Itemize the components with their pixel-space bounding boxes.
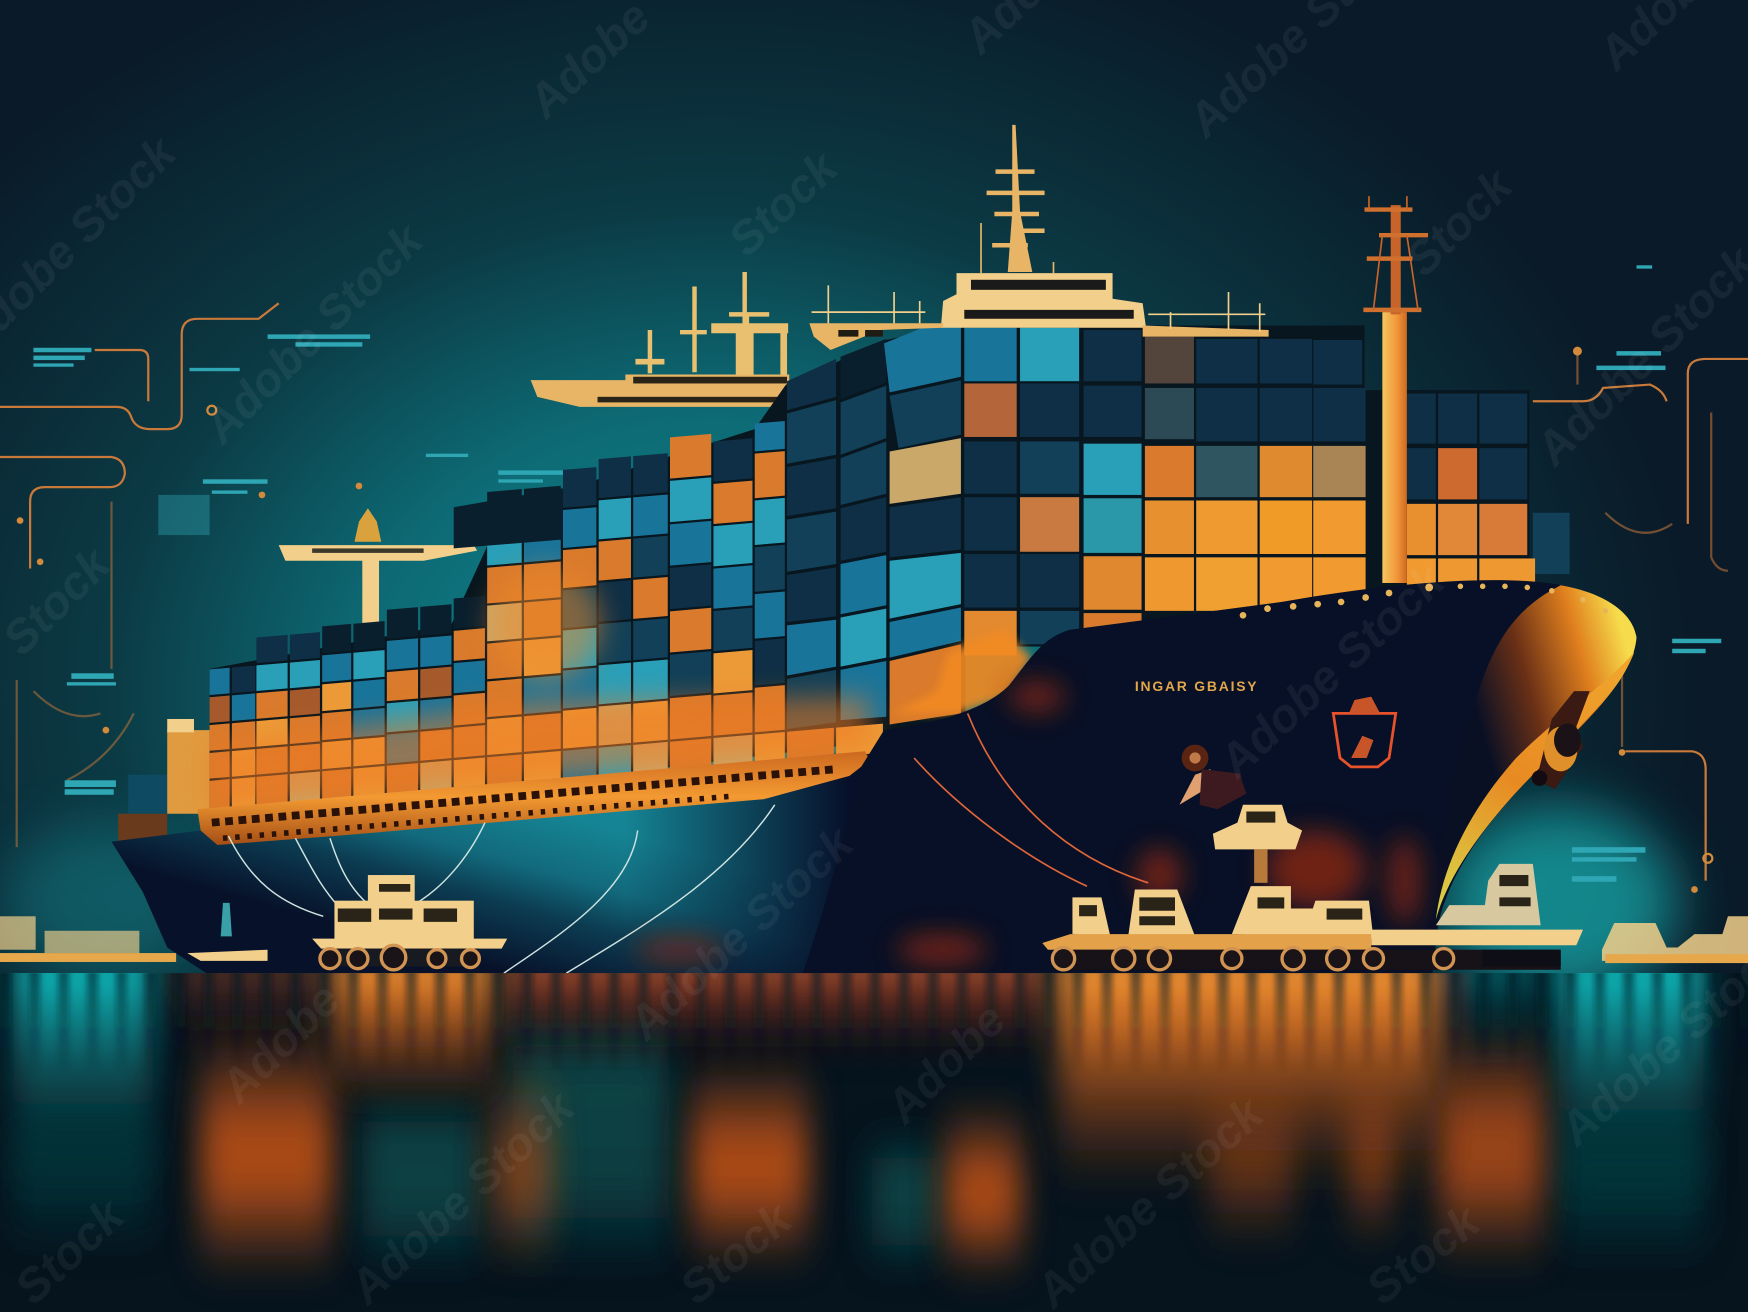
mast yards: [987, 172, 1045, 245]
orange blaze at stack base: [892, 630, 1031, 713]
railing port: [812, 285, 925, 323]
watermark: Adobe Stock: Stock: [718, 140, 848, 266]
tug: crane on hull: [1213, 805, 1302, 883]
row 5: [964, 554, 1535, 611]
forward superstructure: [809, 125, 1269, 350]
background ship: cream vessel: [531, 272, 789, 407]
reflections: bright top band and streaks: [162, 973, 1550, 1184]
starboard wing: [1143, 325, 1269, 337]
watermark: Adobe Stock: Adobe: [875, 993, 1015, 1134]
emblem on hull: [1333, 697, 1396, 767]
foremast: [1363, 196, 1428, 583]
tall column C: [884, 327, 961, 725]
red glow on hull: [635, 681, 1420, 965]
radar mast: [1008, 125, 1032, 272]
stern superstructure: [118, 719, 212, 845]
tall column B: [841, 339, 886, 720]
tug: far right small: [1602, 916, 1748, 963]
tug: far left small: [0, 903, 268, 962]
watermark: Adobe Stock: Adobe Stock: [193, 213, 434, 454]
hull: [531, 375, 789, 407]
reflections: teal light columns: [0, 973, 1726, 1166]
upper bridge block: [941, 273, 1146, 328]
propeller emblem: [1179, 745, 1246, 809]
watermark: Adobe Stock: Adobe Stock: [339, 1079, 585, 1312]
HUD: right circuit lines and data bars: [1533, 265, 1748, 893]
rear container stack: [210, 323, 965, 825]
lower bridge windows: [964, 310, 1134, 319]
tug: left main: [312, 875, 507, 970]
reflections: dark teal columns: [8, 1018, 1711, 1266]
bow flare: bright edge: [1436, 652, 1634, 920]
row 3: [964, 441, 1527, 499]
row 1: [964, 328, 1362, 385]
main mast with platform: [711, 272, 788, 375]
watermark: Adobe Stock: Stock: [1395, 157, 1523, 286]
watermark: Adobe Stock: Stock: [1356, 1194, 1490, 1312]
tall column A: [787, 359, 836, 729]
row 4: [964, 497, 1527, 555]
reflections: orange columns: [201, 1020, 1544, 1282]
watermark: Adobe Stock: Adobe Stock: [617, 815, 864, 1050]
glow: teal behind stern: [0, 825, 201, 981]
row 6: [964, 611, 1142, 655]
front hull: dark navy: [803, 580, 1637, 973]
overhanging top containers: [454, 488, 563, 548]
gantry crane: [279, 508, 477, 633]
tug fleet: right platform: [1042, 864, 1583, 970]
background: teal night sky: [0, 0, 1748, 981]
reflections: all water light columns: [0, 947, 1748, 1282]
HUD: left circuit lines and data bars: [0, 303, 563, 847]
stack silhouette: [210, 323, 965, 825]
anchor on bow: [1532, 691, 1590, 789]
mooring lines: rear ship: [229, 805, 775, 973]
mast antenna: [981, 223, 1053, 273]
water: [0, 973, 1748, 1312]
upper bridge windows: [971, 280, 1106, 290]
railing starboard: [1148, 292, 1265, 332]
orange glow: lower rear stack: [212, 697, 870, 808]
portholes along bow: [1240, 584, 1608, 619]
mooring lines: front ship: [914, 713, 1148, 886]
front container stack: [961, 325, 1570, 655]
row 2: [964, 383, 1527, 444]
port wing windows: [838, 330, 883, 337]
port wing: [809, 323, 943, 350]
mast two: [680, 286, 707, 372]
watermark: Adobe Stock: Adobe Stock: [1208, 553, 1455, 788]
ship name on hull: INGAR GBAISY: [1135, 678, 1258, 694]
mast one: [635, 330, 664, 373]
rear hull: teal: [111, 749, 892, 973]
bow flare: orange to yellow: [1436, 585, 1637, 920]
skewed columns of containers: [210, 413, 883, 810]
watermark: Adobe Stock: Stock: [670, 1191, 802, 1312]
watermark: Adobe Stock: Adobe: [209, 973, 350, 1114]
watermark: Adobe Stock: Adobe Stock: [1025, 1086, 1274, 1312]
windows: [633, 377, 787, 383]
deck band: glowing orange: [197, 751, 870, 845]
glow: bright teal behind bow: [1444, 808, 1678, 998]
reflections: fine vertical stripes: [0, 978, 1748, 1070]
watermark: Adobe Stock: Stock: [5, 1187, 135, 1312]
orange glow: middle rear stack: [491, 568, 602, 680]
